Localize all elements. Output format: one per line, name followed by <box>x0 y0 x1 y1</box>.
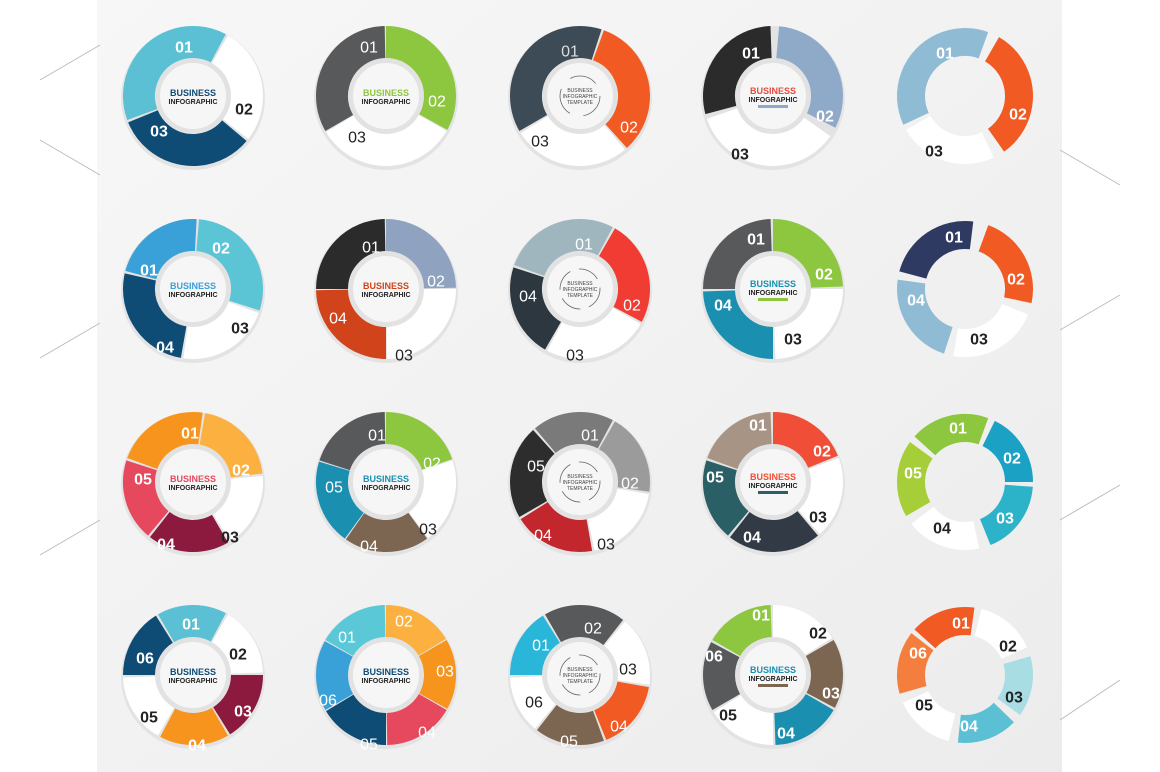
panel: r4c5 six arrows <box>889 599 1041 751</box>
panel: r3c3 five-step template: TEMPLATE <box>567 486 594 492</box>
panel: r4c4 six-step segments: 02 <box>809 626 827 642</box>
panel: r1c4 three-step segments: BUSINESS <box>750 86 796 96</box>
panel: r2c3 four-step template <box>506 215 654 364</box>
panel: r3c1 five-step arrows: INFOGRAPHIC <box>168 485 218 492</box>
panel: r3c4 five-step segments: INFOGRAPHIC <box>748 483 798 490</box>
panel: r4c4 six-step segments: 04 <box>777 726 795 742</box>
panel: r2c3 four-step template: 02 <box>623 298 641 314</box>
panel: r2c3 four-step template: 04 <box>519 288 537 306</box>
panel: r3c4 five-step segments: 02 <box>813 444 831 460</box>
panel: r3c3 five-step template: 05 <box>527 458 545 476</box>
panel: r2c3 four-step template: BUSINESS <box>567 281 593 287</box>
panel: r1c4 three-step segments <box>698 21 848 171</box>
panel: r2c5 four arrows: 04 <box>907 292 925 310</box>
panel: r1c1 three-step arrows <box>117 20 269 172</box>
panel: r4c3 six-step template: 06 <box>525 694 543 712</box>
panel: r3c3 five-step template <box>504 406 656 558</box>
panel: r4c3 six-step template: TEMPLATE <box>567 679 594 685</box>
panel: r4c2 six-step puzzle <box>312 601 460 754</box>
panel: r1c2 three-step puzzle: INFOGRAPHIC <box>362 99 410 106</box>
panel: r2c3 four-step template: 03 <box>566 348 584 364</box>
panel: r3c5 five arrows: 04 <box>933 520 951 538</box>
panel: r1c2 three-step puzzle: 02 <box>428 94 446 110</box>
panel: r2c4 four-step segments: 01 <box>747 232 765 248</box>
panel: r4c1 six-step arrows: 06 <box>136 650 154 668</box>
panel: r4c1 six-step arrows: BUSINESS <box>170 667 216 677</box>
panel: r4c2 six-step puzzle: 01 <box>338 630 356 646</box>
panel: r1c2 three-step puzzle <box>312 22 460 170</box>
panel: r2c2 four-step puzzle: 01 <box>362 240 380 256</box>
panel: r1c3 three-step template: BUSINESS <box>567 88 593 94</box>
panel: r2c2 four-step puzzle: 04 <box>329 310 347 328</box>
panel: r3c1 five-step arrows: 02 <box>232 462 250 480</box>
panel: r1c3 three-step template: 01 <box>561 44 579 60</box>
panel: r2c5 four arrows <box>895 219 1035 359</box>
panel: r1c5 three arrows: 03 <box>925 144 943 160</box>
panel: r4c3 six-step template <box>504 599 656 751</box>
panel: r3c5 five arrows <box>889 406 1041 558</box>
panel: r4c5 six arrows: 06 <box>909 646 927 662</box>
panel: r1c2 three-step puzzle: 01 <box>360 40 378 56</box>
panel: r4c4 six-step segments <box>699 601 847 749</box>
panel: r4c3 six-step template: INFOGRAPHIC <box>563 673 598 679</box>
panel: r3c3 five-step template: 01 <box>581 428 599 444</box>
panel: r3c2 five-step puzzle: INFOGRAPHIC <box>362 485 410 492</box>
panel: r1c3 three-step template: 03 <box>531 134 549 150</box>
panel: r2c4 four-step segments: INFOGRAPHIC <box>748 290 798 297</box>
panel: r4c5 six arrows: 05 <box>915 698 933 714</box>
panel: r3c3 five-step template: INFOGRAPHIC <box>563 480 598 486</box>
panel: r4c3 six-step template: 03 <box>619 662 637 678</box>
panel: r3c2 five-step puzzle: 02 <box>423 456 441 472</box>
panel: r4c1 six-step arrows: INFOGRAPHIC <box>168 678 218 685</box>
panel: r3c3 five-step template: 03 <box>597 536 615 554</box>
panel: r1c4 three-step segments: 03 <box>731 146 749 164</box>
panel: r4c1 six-step arrows <box>119 601 267 754</box>
panel: r3c1 five-step arrows: 03 <box>221 530 239 546</box>
panel: r1c5 three arrows <box>891 22 1039 170</box>
panel: r3c3 five-step template: BUSINESS <box>567 474 593 480</box>
panel: r4c2 six-step puzzle: 03 <box>436 664 454 680</box>
panel: r4c2 six-step puzzle: 02 <box>395 614 413 630</box>
panel: r4c1 six-step arrows: 03 <box>234 704 252 720</box>
panel: r2c1 four-step arrows: 04 <box>156 340 174 356</box>
panel: r2c4 four-step segments: 03 <box>784 332 802 348</box>
panel: r3c5 five arrows: 03 <box>996 510 1014 528</box>
panel: r2c4 four-step segments: BUSINESS <box>750 279 796 289</box>
panel: r3c1 five-step arrows: 01 <box>181 426 199 442</box>
panel: r4c1 six-step arrows: 02 <box>229 646 247 664</box>
panel: r4c3 six-step template: 01 <box>532 638 550 654</box>
panel: r1c4 three-step segments: INFOGRAPHIC <box>748 97 798 104</box>
panel: r2c2 four-step puzzle: INFOGRAPHIC <box>362 292 410 299</box>
panel: r2c1 four-step arrows <box>121 219 265 363</box>
panel: r2c5 four arrows: 03 <box>970 332 988 348</box>
panel: r3c2 five-step puzzle: 05 <box>325 480 343 496</box>
panel: r3c1 five-step arrows: 04 <box>157 536 175 554</box>
panel: r3c5 five arrows: 05 <box>904 466 922 482</box>
panel: r2c2 four-step puzzle <box>314 219 458 364</box>
panel: r2c1 four-step arrows: BUSINESS <box>170 281 216 291</box>
panel: r3c1 five-step arrows: 05 <box>134 472 152 488</box>
panel: r1c2 three-step puzzle: BUSINESS <box>363 88 409 98</box>
panel: r2c5 four arrows: 01 <box>945 230 963 246</box>
panel: r2c2 four-step puzzle: BUSINESS <box>363 281 409 291</box>
panel: r3c5 five arrows: 02 <box>1003 450 1021 468</box>
panel: r1c4 three-step segments: 02 <box>816 108 834 126</box>
panel: r1c3 three-step template: TEMPLATE <box>567 100 594 106</box>
panel: r1c3 three-step template <box>504 20 656 172</box>
panel: r2c4 four-step segments: 04 <box>714 298 732 314</box>
panel: r4c3 six-step template: 04 <box>610 718 628 736</box>
panel: r3c4 five-step segments <box>697 406 849 558</box>
panel: r3c2 five-step puzzle <box>311 407 461 557</box>
panel: r2c3 four-step template: TEMPLATE <box>567 293 594 299</box>
panel: r4c4 six-step segments: INFOGRAPHIC <box>748 676 798 683</box>
panel: r4c5 six arrows: 03 <box>1005 690 1023 706</box>
panel: r4c2 six-step puzzle: BUSINESS <box>363 667 409 677</box>
panel: r3c2 five-step puzzle: BUSINESS <box>363 474 409 484</box>
panel: r1c4 three-step segments: 01 <box>742 46 760 62</box>
panel: r3c4 five-step segments: 01 <box>749 418 767 434</box>
panel: r3c1 five-step arrows <box>117 406 269 558</box>
panel: r4c3 six-step template: 05 <box>560 734 578 750</box>
panel: r4c1 six-step arrows: 01 <box>182 616 200 634</box>
panel: r4c4 six-step segments: 03 <box>822 686 840 702</box>
panel: r3c4 five-step segments: 04 <box>743 530 761 546</box>
panel: r2c1 four-step arrows: 01 <box>140 262 158 280</box>
panel: r3c2 five-step puzzle: 04 <box>360 538 378 556</box>
panel: r2c2 four-step puzzle: 02 <box>427 274 445 290</box>
panel: r4c2 six-step puzzle: 05 <box>360 736 378 754</box>
panel: r3c4 five-step segments: 03 <box>809 510 827 526</box>
panel: r1c1 three-step arrows: 01 <box>175 40 193 56</box>
panel: r1c2 three-step puzzle: 03 <box>348 130 366 146</box>
panel: r4c3 six-step template: BUSINESS <box>567 667 593 673</box>
panel: r3c2 five-step puzzle: 03 <box>419 522 437 538</box>
panel: r4c2 six-step puzzle: INFOGRAPHIC <box>362 678 410 685</box>
panel: r4c4 six-step segments: BUSINESS <box>750 665 796 675</box>
panel: r4c1 six-step arrows: 05 <box>140 710 158 726</box>
panel: r2c5 four arrows: 02 <box>1007 272 1025 288</box>
panel: r4c4 six-step segments: 06 <box>705 648 723 666</box>
panel: r4c4 six-step segments: 01 <box>752 608 770 624</box>
panel: r4c5 six arrows: 02 <box>999 638 1017 656</box>
panel: r2c1 four-step arrows: INFOGRAPHIC <box>168 292 218 299</box>
panel: r2c3 four-step template: 01 <box>575 236 593 254</box>
panel: r1c3 three-step template: 02 <box>620 120 638 136</box>
panel: r2c1 four-step arrows: 03 <box>231 320 249 338</box>
panel: r3c3 five-step template: 02 <box>621 476 639 492</box>
panel: r4c3 six-step template: 02 <box>584 620 602 638</box>
panel: r2c2 four-step puzzle: 03 <box>395 348 413 364</box>
panel: r2c3 four-step template: INFOGRAPHIC <box>563 287 598 293</box>
panel: r1c1 three-step arrows: BUSINESS <box>170 88 216 98</box>
panel: r1c1 three-step arrows: 02 <box>235 102 253 118</box>
panel: r4c5 six arrows: 04 <box>960 718 978 736</box>
panel: r4c5 six arrows: 01 <box>952 616 970 632</box>
panel: r3c4 five-step segments: BUSINESS <box>750 472 796 482</box>
panel: r3c1 five-step arrows: BUSINESS <box>170 474 216 484</box>
panel: r3c5 five arrows: 01 <box>949 420 967 438</box>
panel: r4c1 six-step arrows: 04 <box>188 738 206 754</box>
panel: r1c5 three arrows: 02 <box>1009 106 1027 124</box>
panel: r4c2 six-step puzzle: 06 <box>319 692 337 710</box>
panel: r1c1 three-step arrows: 03 <box>150 124 168 140</box>
panel: r1c1 three-step arrows: INFOGRAPHIC <box>168 99 218 106</box>
panel: r1c5 three arrows: 01 <box>936 46 954 62</box>
panel: r2c1 four-step arrows: 02 <box>212 240 230 258</box>
panel: r3c3 five-step template: 04 <box>534 528 552 544</box>
panel: r1c3 three-step template: INFOGRAPHIC <box>563 94 598 100</box>
panel: r3c4 five-step segments: 05 <box>706 470 724 486</box>
panel: r2c4 four-step segments <box>701 219 845 363</box>
panel: r4c4 six-step segments: 05 <box>719 708 737 724</box>
panel: r3c2 five-step puzzle: 01 <box>368 428 386 444</box>
panel: r2c4 four-step segments: 02 <box>815 266 833 284</box>
panel: r4c2 six-step puzzle: 04 <box>418 724 436 742</box>
